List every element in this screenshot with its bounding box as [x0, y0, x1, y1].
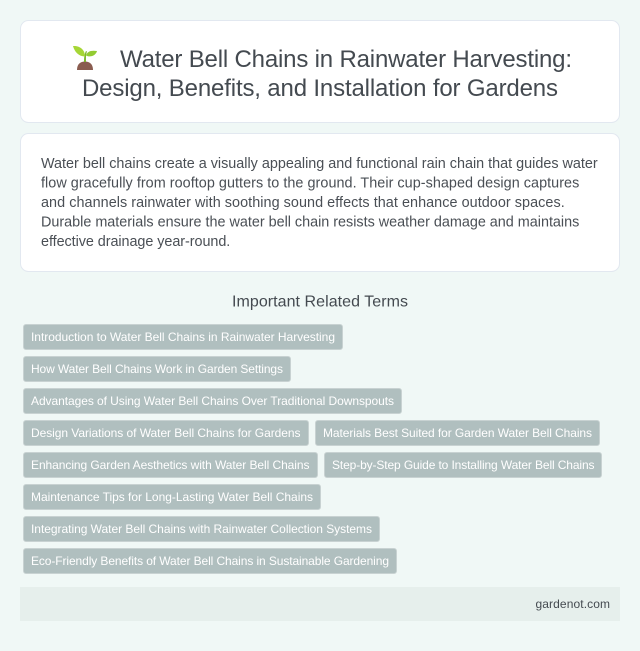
tag: [24, 548, 396, 574]
text block: description: Water bell chains create a visually appealing and functional rain chain that guides water: [41, 156, 598, 172]
text block: description: [41, 156, 598, 250]
tag: Advantages of Using Water Bell Chains Over Traditional Downspouts: [31, 394, 394, 408]
text block: description: and channels rainwater with soothing sound effects that enhance outdoor spaces.: [41, 195, 565, 211]
tag: [24, 420, 308, 446]
panel: title card: [20, 20, 620, 122]
tag: [24, 324, 342, 350]
tag: How Water Bell Chains Work in Garden Settings: [31, 362, 283, 376]
tag: [24, 516, 380, 542]
tag: Enhancing Garden Aesthetics with Water Bell Chains: [31, 458, 310, 472]
text block: description: effective drainage year-round.: [41, 234, 230, 250]
tag: Eco-Friendly Benefits of Water Bell Chains in Sustainable Gardening: [31, 554, 389, 568]
panel: description: [20, 134, 620, 272]
tag: Maintenance Tips for Long-Lasting Water Bell Chains: [31, 490, 313, 504]
tag: Introduction to Water Bell Chains in Rainwater Harvesting: [31, 330, 335, 344]
heading: related terms: Important Related Terms: [232, 294, 408, 310]
tag: [316, 420, 600, 446]
footer text: gardenot.com: [536, 597, 610, 611]
tag: Materials Best Suited for Garden Water Bell Chains: [323, 426, 592, 440]
text block: description: flow gracefully from rooftop gutters to the ground. Their cup-shaped design captures: [41, 176, 579, 192]
tag list: [24, 324, 602, 574]
tag: Design Variations of Water Bell Chains for Gardens: [31, 426, 300, 440]
tag: Step-by-Step Guide to Installing Water Bell Chains: [332, 458, 594, 472]
tag: [24, 388, 402, 414]
title: Design, Benefits, and Installation for Gardens: [82, 75, 558, 102]
tag: [324, 452, 602, 478]
icon: seedling: [73, 46, 97, 70]
text block: description: Durable materials ensure the water bell chain resists weather damage and maintains: [41, 214, 579, 230]
tag: [24, 356, 290, 382]
title: [82, 46, 572, 102]
tag: [24, 484, 320, 510]
tag: Integrating Water Bell Chains with Rainwater Collection Systems: [31, 522, 372, 536]
title: Water Bell Chains in Rainwater Harvesting:: [120, 46, 572, 73]
tag: [24, 452, 318, 478]
footer: [20, 587, 620, 621]
